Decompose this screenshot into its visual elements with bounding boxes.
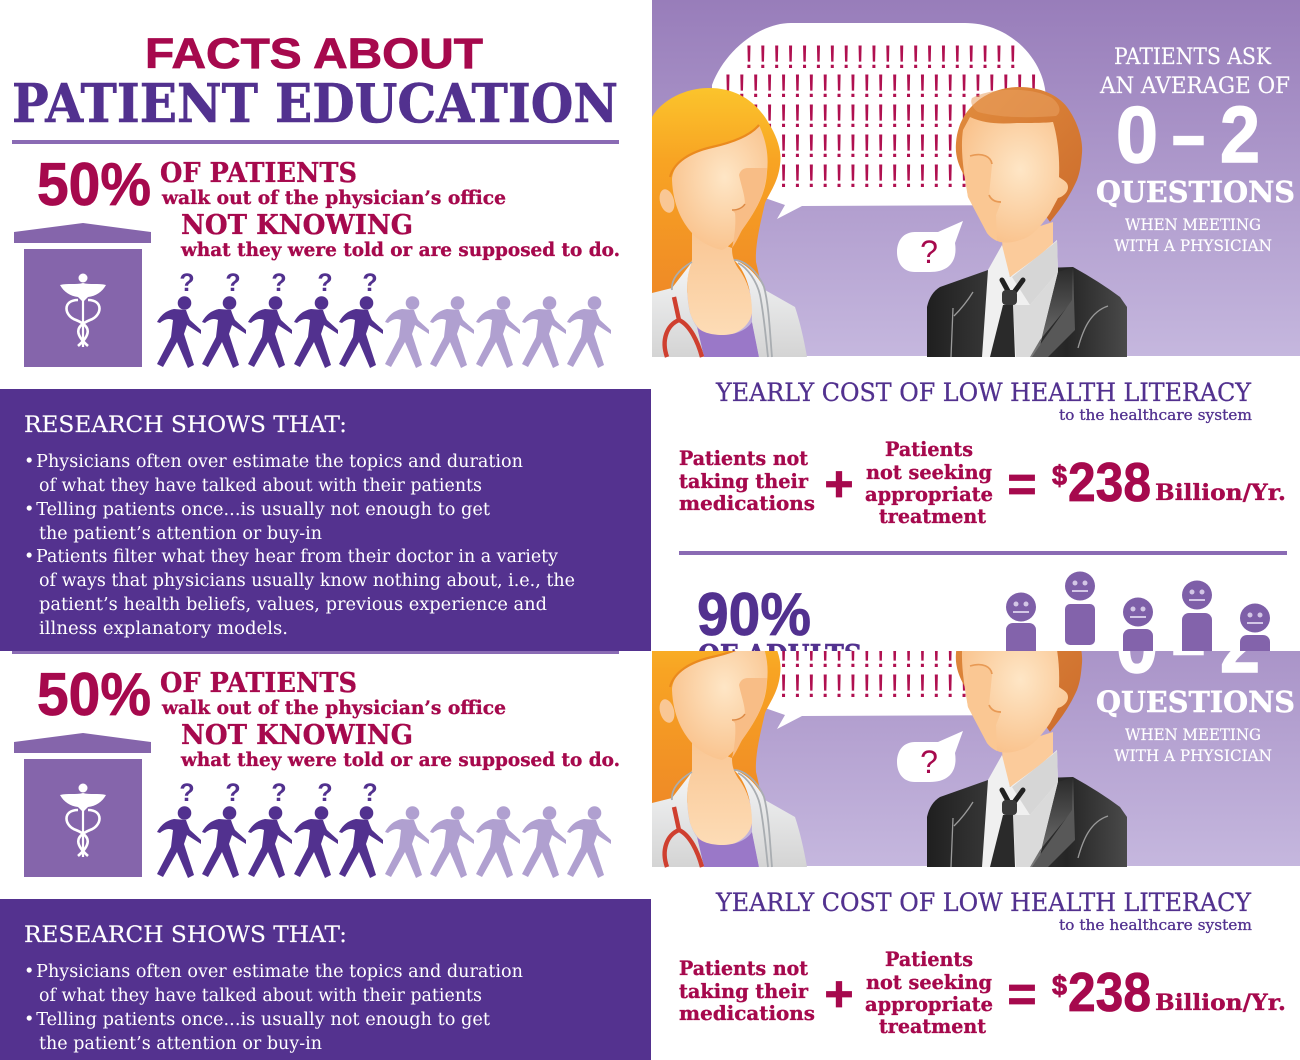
equation term repeated: not seeking treatment: treatment: [879, 1014, 987, 1038]
research bullet list repeated: • Telling patients once...is usually not enough to get: [24, 1010, 490, 1030]
questions statistic text repeated: WHEN MEETING: [1125, 725, 1261, 744]
research bullet list: [24, 452, 575, 639]
panel: patients ask questions illustration: [652, 0, 1300, 357]
cost heading repeated: YEARLY COST OF LOW HEALTH LITERACY: [715, 888, 1251, 917]
illustration: doctor repeated: [652, 598, 807, 867]
illustration: patient repeated: [927, 597, 1127, 867]
exclamation marks in doctor's speech bubble: !!!!!!!!!!!!!!!!!!!!: [744, 39, 1022, 75]
questions statistic text: [1096, 45, 1295, 255]
icon: pillar repeated: [14, 733, 151, 877]
question marks repeated: ?: [362, 779, 378, 807]
title line: patient education: PATIENT EDUCATION: [12, 73, 618, 135]
question marks repeated: [179, 779, 378, 807]
icon: five dark walking patients: [157, 296, 383, 368]
equation term repeated: not seeking treatment: [865, 947, 993, 1038]
cost figure repeated: Billion/Yr.: [1155, 990, 1286, 1016]
question marks above confused patients: ?: [317, 269, 333, 297]
research bullet list: patient’s health beliefs, values, previous experience and: [39, 595, 547, 615]
equation term repeated: not taking medications: [679, 956, 815, 1025]
equation term repeated: not taking medications: medications: [679, 1001, 815, 1025]
research bullet list: illness explanatory models.: [39, 619, 288, 639]
illustration: doctor: [652, 88, 807, 357]
icon: physician office pillar: [14, 223, 151, 367]
cost figure: 238 billion per year: 238: [1068, 451, 1151, 513]
equals sign repeated: =: [1007, 966, 1037, 1022]
panel: repeated lower copy of the infographic: [0, 651, 1300, 1060]
icon: five light walkers repeated: [385, 806, 611, 878]
equation term: not seeking treatment: [865, 437, 993, 528]
questions statistic text: –: [1172, 90, 1205, 179]
question mark repeated: ?: [920, 744, 938, 780]
research bullet list repeated: the patient’s attention or buy-in: [39, 1034, 322, 1054]
questions statistic text repeated: [1096, 600, 1295, 765]
statistic text repeated: NOT KNOWING: [181, 720, 413, 751]
exclamation marks repeated: !!!!!!!!!!!!!!!!!!!!!!!: [724, 638, 1043, 674]
exclamation marks in doctor's speech bubble: !!!!!!!!!!!!!!!!!!!!!!!: [724, 98, 1043, 134]
panel: illustration repeated: [652, 510, 1300, 867]
questions statistic text: QUESTIONS: [1096, 175, 1295, 209]
speech bubbles repeated: [652, 510, 1300, 866]
panel: research shows that repeated: [0, 899, 651, 1060]
panel: yearly cost of low health literacy: [679, 378, 1286, 528]
statistic text: OF PATIENTS: [160, 158, 357, 189]
statistic text: [160, 158, 620, 261]
equation term: not taking medications: taking their: [679, 469, 808, 493]
questions statistic text: 2: [1220, 90, 1260, 179]
plus sign: +: [824, 456, 854, 512]
questions statistic text: 0: [1116, 90, 1158, 179]
question marks repeated: ?: [225, 779, 241, 807]
cost figure repeated: $: [1052, 970, 1067, 1001]
questions statistic text: PATIENTS ASK: [1114, 45, 1272, 70]
questions statistic text repeated: WITH A PHYSICIAN: [1114, 746, 1272, 765]
cost figure repeated: 238: [1068, 961, 1151, 1023]
question marks above confused patients: ?: [271, 269, 287, 297]
statistic text repeated: OF PATIENTS: [160, 668, 357, 699]
questions statistic text repeated: –: [1172, 600, 1205, 689]
equation term repeated: not seeking treatment: Patients: [885, 947, 973, 971]
question marks above confused patients: [180, 273, 376, 291]
panel: 50 percent statistic: [14, 151, 620, 368]
statistic text repeated: what they were told or are supposed to do.: [180, 749, 620, 771]
research bullet list repeated: of what they have talked about with their patients: [39, 986, 482, 1006]
research bullet list: • Telling patients once...is usually not enough to get: [24, 500, 490, 520]
research bullet list: the patient’s attention or buy-in: [39, 524, 322, 544]
equation term repeated: not seeking treatment: not seeking: [866, 970, 992, 994]
question marks above confused patients: ?: [179, 269, 195, 297]
statistic text: NOT KNOWING: [181, 210, 413, 241]
cost figure: 238 billion per year: $: [1052, 460, 1067, 491]
clipped label: of adults: OF ADULTS: [698, 640, 862, 671]
speech bubbles on purple background: [652, 0, 1300, 356]
question marks above confused patients: ?: [225, 269, 241, 297]
exclamation marks in doctor's speech bubble: [726, 46, 1036, 187]
equation term: not seeking treatment: not seeking: [866, 460, 992, 484]
big number: 50%: 50%: [37, 151, 151, 218]
research heading: RESEARCH SHOWS THAT:: [24, 413, 347, 438]
illustration: patient: [927, 87, 1127, 357]
research bullet list: • Physicians often over estimate the topics and duration: [24, 452, 523, 472]
icon: caduceus: [60, 274, 106, 347]
research bullet list: of ways that physicians usually know nothing about, i.e., the: [39, 571, 575, 591]
panel: 90 percent of adults: [698, 572, 1270, 651]
exclamation marks in doctor's speech bubble: !!!!!!!!!!!!!!!!!!!!!!!: [724, 128, 1043, 164]
statistic text repeated: [160, 668, 620, 771]
research bullet list: • Patients filter what they hear from their doctor in a variety: [24, 547, 558, 567]
big number: 50% repeated: 50%: [37, 661, 151, 728]
panel: yearly cost repeated: [679, 888, 1286, 1038]
question mark in patient's speech bubble: ?: [920, 234, 938, 270]
cost heading: YEARLY COST OF LOW HEALTH LITERACY: [715, 378, 1251, 407]
research bullet list repeated: • Physicians often over estimate the topics and duration: [24, 962, 523, 982]
research bullet list repeated: [24, 962, 523, 1054]
question marks repeated: ?: [317, 779, 333, 807]
big number: 90%: 90%: [697, 581, 811, 648]
statistic text repeated: walk out of the physician’s office: [161, 697, 506, 719]
icon: five light walking patients: [385, 296, 611, 368]
cost subheading repeated: to the healthcare system: [1059, 916, 1252, 934]
icon: row of neutral faced people: [1006, 572, 1270, 651]
exclamation marks in doctor's speech bubble: !!!!!!!!!!!!!!!!!!!!!!!: [724, 158, 1043, 194]
questions statistic text: WITH A PHYSICIAN: [1114, 236, 1272, 255]
panel: repeated 50 percent statistic: [14, 661, 620, 878]
icon: caduceus repeated: [60, 784, 106, 857]
equation term: not seeking treatment: Patients: [885, 437, 973, 461]
equation term: not taking medications: Patients not: [679, 446, 809, 470]
panel: first copy of the infographic: [0, 0, 1300, 695]
research bullet list: of what they have talked about with their patients: [39, 476, 482, 496]
research heading repeated: RESEARCH SHOWS THAT:: [24, 923, 347, 948]
statistic text: what they were told or are supposed to do.: [180, 239, 620, 261]
questions statistic text repeated: 2: [1220, 600, 1260, 689]
equals sign: =: [1007, 456, 1037, 512]
exclamation marks repeated: !!!!!!!!!!!!!!!!!!!!!!!: [724, 668, 1043, 704]
question marks repeated: ?: [179, 779, 195, 807]
questions statistic text repeated: QUESTIONS: [1096, 685, 1295, 719]
equation term repeated: not taking medications: Patients not: [679, 956, 809, 980]
title line: facts about: FACTS ABOUT: [145, 30, 483, 78]
exclamation marks repeated: [724, 638, 1043, 704]
questions statistic text: WHEN MEETING: [1125, 215, 1261, 234]
plus sign repeated: +: [824, 966, 854, 1022]
equation term repeated: not taking medications: taking their: [679, 979, 808, 1003]
statistic text: walk out of the physician’s office: [161, 187, 506, 209]
questions statistic text: AN AVERAGE OF: [1099, 74, 1290, 99]
title: [14, 38, 616, 124]
cost subheading: to the healthcare system: [1059, 406, 1252, 424]
equation term: not seeking treatment: appropriate: [865, 482, 993, 506]
equation term: not taking medications: medications: [679, 491, 815, 515]
icon: five dark walkers repeated: [157, 806, 383, 878]
question marks above confused patients: ?: [362, 269, 378, 297]
question marks repeated: ?: [271, 779, 287, 807]
questions statistic text repeated: 0: [1116, 600, 1158, 689]
equation term: not taking medications: [679, 450, 814, 510]
equation term: not seeking treatment: treatment: [879, 504, 987, 528]
equation term repeated: not seeking treatment: appropriate: [865, 992, 993, 1016]
exclamation marks in doctor's speech bubble: !!!!!!!!!!!!!!!!!!!!!!!: [724, 68, 1043, 104]
cost figure: 238 billion per year: Billion/Yr.: [1155, 480, 1286, 506]
cost figure: 238 billion per year: [1052, 462, 1284, 502]
cost figure repeated: [1052, 961, 1286, 1023]
panel: research shows that: [0, 389, 651, 651]
